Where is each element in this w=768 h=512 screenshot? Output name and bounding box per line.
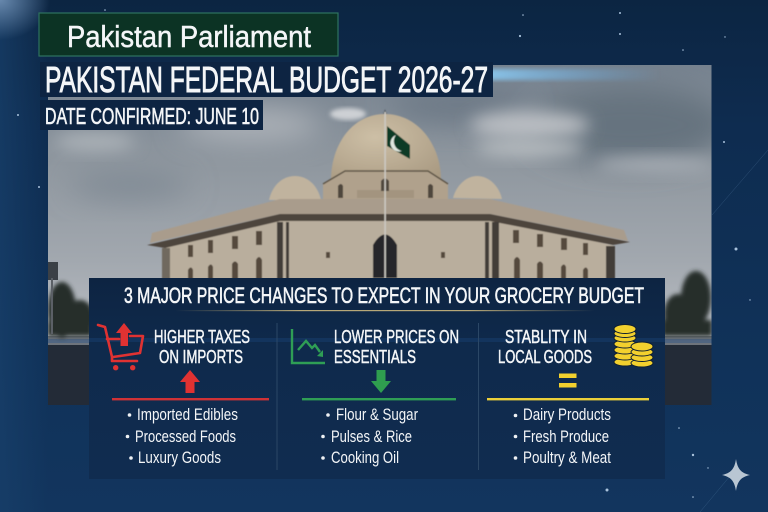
bullet list: Processed Foods bbox=[135, 427, 236, 446]
subheading: date confirmed: DATE CONFIRMED: JUNE 10 bbox=[45, 103, 259, 129]
icon: coin stacks bbox=[614, 324, 653, 367]
bullet list: Fresh Produce bbox=[523, 427, 609, 446]
icon: down arrow bbox=[371, 370, 391, 393]
bullet list: Flour & Sugar bbox=[336, 405, 418, 424]
sky with clouds bbox=[48, 65, 730, 345]
icon: equals sign bbox=[559, 374, 576, 388]
column heading: LOWER PRICES ON bbox=[334, 326, 459, 347]
arch door bbox=[373, 234, 397, 278]
column: stability bbox=[487, 324, 653, 467]
heading: federal budget: PAKISTAN FEDERAL BUDGET 2026-27 bbox=[45, 59, 488, 100]
heading: federal budget bbox=[40, 59, 493, 100]
column heading: STABLITY IN bbox=[505, 326, 587, 347]
trees bbox=[48, 271, 712, 338]
bullet list: Luxury Goods bbox=[138, 448, 221, 467]
column: lower prices: ESSENTIALS bbox=[334, 346, 416, 367]
column: lower prices bbox=[292, 326, 459, 467]
bullet list: Pulses & Rice bbox=[331, 427, 412, 446]
flagpole bbox=[384, 112, 386, 280]
bullet list: Imported Edibles bbox=[137, 405, 238, 424]
column heading: HIGHER TAXES bbox=[154, 326, 250, 347]
bullet list: Poultry & Meat bbox=[523, 448, 611, 467]
icon: up arrow bbox=[180, 370, 200, 393]
bullet list bbox=[514, 405, 611, 467]
title: Pakistan Parliament: Pakistan Parliament bbox=[67, 19, 311, 54]
columns bbox=[162, 248, 170, 280]
street lamp bbox=[48, 262, 58, 334]
roof underside bbox=[147, 214, 630, 248]
icon: sparkle star bbox=[722, 459, 750, 491]
column: higher taxes: ON IMPORTS bbox=[159, 346, 243, 367]
bullet list: Cooking Oil bbox=[331, 448, 399, 467]
drum bbox=[323, 172, 448, 199]
small windows bbox=[188, 230, 588, 280]
icon: shopping cart with up arrow bbox=[98, 323, 143, 370]
photo: Pakistan Parliament building under cloudy sky bbox=[48, 65, 730, 405]
icon: falling line chart bbox=[292, 329, 325, 363]
bullet list bbox=[321, 405, 418, 467]
wall bbox=[166, 220, 614, 278]
bullet list bbox=[126, 405, 238, 467]
column: higher taxes bbox=[98, 323, 269, 467]
roof slab bbox=[150, 199, 628, 243]
column: stability: LOCAL GOODS bbox=[498, 346, 592, 367]
subheading: date confirmed bbox=[40, 100, 263, 130]
parliament building bbox=[147, 109, 630, 281]
ground and dark foreground bbox=[48, 336, 712, 405]
bullet list: Dairy Products bbox=[523, 405, 611, 424]
flag bbox=[387, 126, 410, 159]
panel: price changes bbox=[89, 278, 665, 479]
main dome bbox=[331, 114, 441, 180]
side domes bbox=[269, 176, 321, 200]
